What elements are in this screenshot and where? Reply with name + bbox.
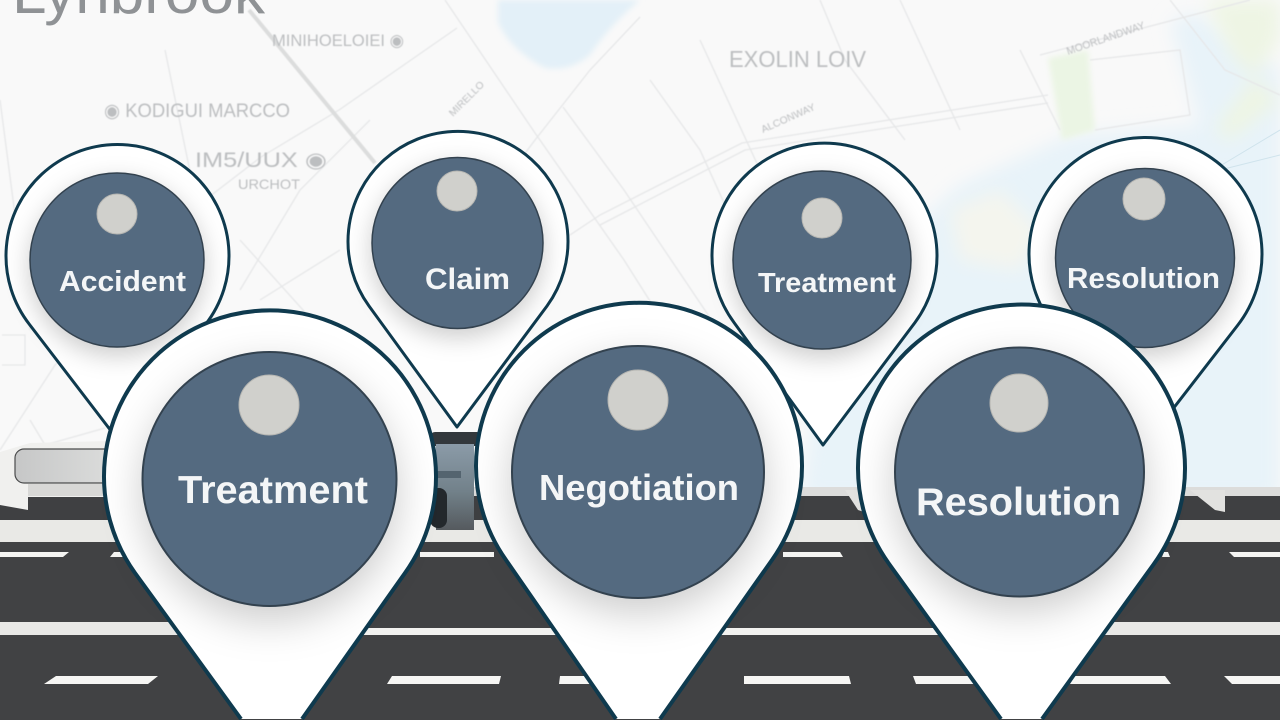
pin label: Accident: [59, 266, 186, 298]
pin: Treatment large: [104, 310, 436, 719]
pin: Accident: [6, 145, 229, 440]
pin knob: [990, 374, 1048, 432]
road: [0, 487, 1280, 720]
highway on map: [249, 10, 375, 163]
pin: Resolution small: [1029, 138, 1262, 445]
pin: Treatment small: [712, 143, 937, 445]
map label: MINIHOELOIEI ◉: [272, 31, 404, 50]
map label: ALCONWAY: [760, 102, 818, 136]
pin knob: [802, 198, 842, 238]
main carriageway: [0, 542, 1280, 720]
map label: URCHOT: [238, 176, 300, 192]
lane dashes upper: [0, 552, 1280, 557]
map label: MOORLANDWAY: [1065, 20, 1147, 58]
pin knob: [437, 171, 477, 211]
street grid: [0, 0, 1280, 450]
map background: [0, 0, 1280, 500]
land patch: [950, 190, 1040, 270]
lane dashes lower: [44, 676, 1280, 684]
white car: [0, 441, 115, 510]
pin: Claim: [348, 131, 568, 427]
streams: [1180, 130, 1280, 190]
upper carriageway: [0, 496, 1280, 520]
park: [1048, 50, 1095, 140]
pin label: Claim: [425, 263, 510, 296]
pin label: Treatment: [758, 267, 896, 298]
dark car: [430, 432, 482, 530]
road edge details right: [845, 490, 1225, 512]
map label: MIRELLO: [447, 79, 487, 119]
pin: Resolution large: [858, 305, 1185, 719]
map label: EXOLIN LOIV: [729, 46, 867, 72]
water: bay: [800, 12, 1280, 500]
pin: Negotiation large: [476, 303, 802, 719]
pin label: Resolution: [916, 481, 1121, 524]
median line thin: [360, 628, 1115, 635]
map label: ◉ KODIGUI MARCCO: [104, 101, 290, 122]
pin label: Resolution: [1067, 263, 1220, 295]
shoulder strip: [0, 487, 1280, 497]
pin label: Negotiation: [539, 467, 739, 508]
pin knob: [239, 375, 299, 435]
park: east: [1205, 0, 1280, 140]
pin label: Treatment: [178, 469, 368, 512]
pin knob: [97, 194, 137, 234]
upper white band: [0, 520, 1280, 542]
pin knob: [1123, 178, 1165, 220]
median line right: [1100, 622, 1280, 635]
map label: IM5/UUX ◉: [195, 149, 327, 172]
pin knob: [608, 370, 668, 430]
water: lake: [498, 0, 640, 69]
median line left: [0, 622, 185, 635]
